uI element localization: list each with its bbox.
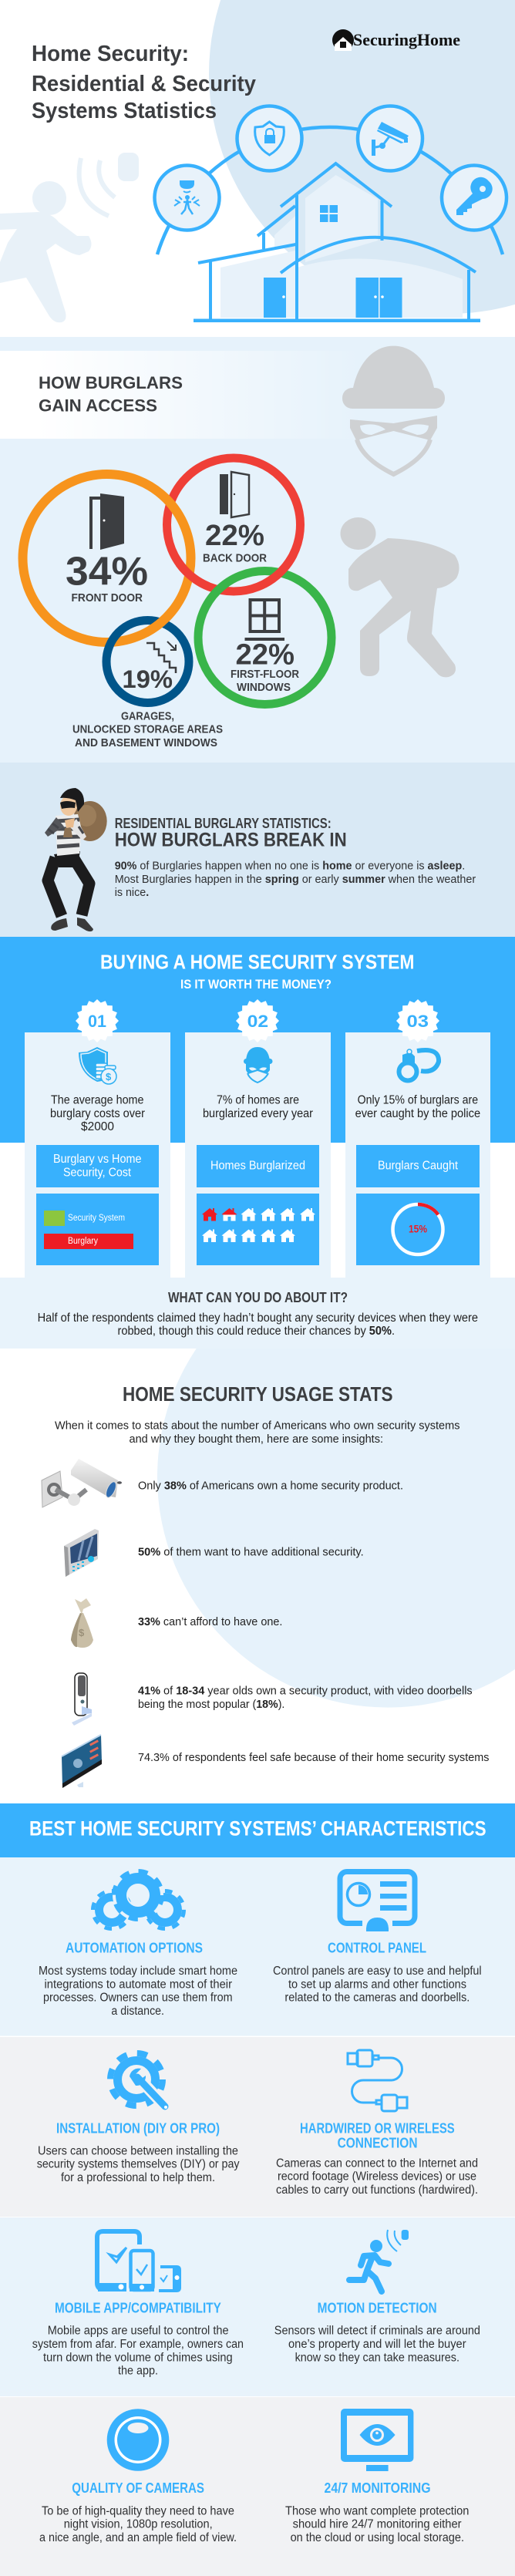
icon: key ring [442, 165, 507, 230]
feature: automation options: a distance. [111, 2005, 164, 2018]
panel: best characteristics heading [0, 1803, 515, 1857]
bar chart [36, 1194, 159, 1265]
icon: control panel [64, 1529, 99, 1577]
text: Only 15% of burglars are [358, 1093, 478, 1107]
box title: Burglary vs Home [53, 1153, 142, 1166]
icon: motion sensor ring [154, 165, 219, 230]
feature: motion detection: know so they can take measures. [295, 2351, 459, 2364]
title [32, 42, 256, 123]
icon: shield lock ring [237, 106, 302, 171]
intro text: When it comes to stats about the number of Americans who own security systems [55, 1419, 459, 1433]
text block [115, 859, 476, 899]
ring: green [198, 571, 332, 705]
title: Systems Statistics [32, 99, 217, 123]
feature: mobile app: system from afar. For example, owners can [32, 2338, 244, 2351]
icon: shield and coins: $ [106, 1071, 112, 1083]
icon: mask [244, 1047, 273, 1083]
card 1 [25, 999, 170, 1278]
feature: motion detection: MOTION DETECTION [318, 2300, 437, 2315]
feature: mobile app: Mobile apps are useful to control the [48, 2325, 229, 2338]
bar chart: Security System [68, 1214, 125, 1223]
text: ever caught by the police [355, 1107, 480, 1120]
feature: mobile app: the app. [118, 2365, 158, 2378]
text block: Most Burglaries happen in the spring or early summer when the weather [115, 873, 476, 886]
heading: HOW BURGLARS BREAK IN [115, 830, 347, 851]
feature: 24/7 monitoring: should hire 24/7 monitoring either [293, 2518, 462, 2531]
feature: quality of cameras: night vision, 1080p resolution, [64, 2518, 213, 2531]
heading: HOME SECURITY USAGE STATS [123, 1382, 393, 1406]
stat: garages: AND BASEMENT WINDOWS [75, 736, 217, 749]
feature: 24/7 monitoring: Those who want complete protection [285, 2504, 469, 2517]
feature: motion detection: one’s property and will let the buyer [288, 2338, 466, 2351]
feature: 24/7 monitoring: on the cloud or using local storage. [291, 2531, 464, 2544]
heading: BUYING A HOME SECURITY SYSTEM [100, 950, 415, 973]
feature: mobile app: MOBILE APP/COMPATIBILITY [55, 2300, 221, 2315]
stat: garages: UNLOCKED STORAGE AREAS [72, 723, 223, 736]
feature: automation options: integrations to automate most of their [45, 1978, 232, 1991]
panel: mobile and motion [0, 2217, 515, 2396]
icon: smart doorbell [72, 1673, 92, 1726]
stat 4 [72, 1673, 473, 1726]
text block: robbed, though this could reduce their chances by 50%. [117, 1325, 395, 1338]
text block: is nice. [115, 886, 149, 899]
feature: quality of cameras: To be of high-quality they need to have [42, 2504, 234, 2517]
icon: camera lens [107, 2409, 169, 2471]
ring: red [167, 458, 301, 591]
icon: gears [93, 1871, 183, 1929]
feature: control panel: to set up alarms and other functions [288, 1978, 466, 1991]
feature: installation: Users can choose between installing the [38, 2144, 238, 2157]
stat 3 [71, 1598, 282, 1648]
heading: IS IT WORTH THE MONEY? [180, 977, 332, 992]
feature: hardwired or wireless [276, 2050, 478, 2197]
ring: orange [23, 474, 191, 642]
heading: GAIN ACCESS [39, 396, 157, 415]
panel: buying a home security system [0, 937, 515, 1278]
logo: SecuringHome: SecuringHome [353, 30, 460, 49]
feature: hardwired or wireless: Cameras can connect to the Internet and [276, 2157, 478, 2170]
text: burglary costs over [50, 1107, 145, 1120]
box title: Burglars Caught [378, 1160, 458, 1172]
stat 1: Only 38% of Americans own a home security product. [138, 1480, 403, 1493]
text: burglarized every year [203, 1107, 313, 1120]
stat: front door: FRONT DOOR [71, 591, 143, 604]
badge 01 [76, 999, 119, 1042]
icon: runner with sensor [349, 2230, 409, 2291]
badge 03 [396, 999, 439, 1042]
icon: shield and coins [79, 1047, 116, 1084]
panel: hero [0, 0, 515, 337]
stat 5 [62, 1735, 489, 1788]
badge 02 [236, 999, 279, 1042]
background circle [157, 1349, 515, 1707]
illustration: burglar with sack [45, 788, 107, 931]
feature: motion detection [274, 2230, 480, 2364]
feature: mobile app: turn down the volume of chimes using [43, 2351, 233, 2364]
stat: garages: GARAGES, [121, 709, 174, 723]
badge 02: 02 [247, 1012, 268, 1031]
stat: front door [66, 493, 148, 604]
panel: how burglars gain access [0, 337, 515, 763]
feature: hardwired or wireless: record footage (Wireless devices) or use [278, 2170, 476, 2184]
stat: first-floor windows: 22% [236, 638, 295, 671]
stat 4: 41% of 18-34 year olds own a security product, with video doorbells [138, 1684, 473, 1697]
intro text: and why they bought them, here are some insights: [130, 1433, 383, 1446]
card 2 [185, 999, 331, 1278]
doors [264, 278, 402, 318]
stat: back door [203, 472, 267, 564]
icon: monitor with eye [341, 2409, 413, 2471]
stat 1 [42, 1459, 403, 1507]
feature: installation: security systems themselves (DIY) or pay [37, 2158, 240, 2171]
feature: hardwired or wireless: cables to carry out functions (hardwired). [276, 2184, 478, 2197]
box title [197, 1145, 319, 1187]
panel: installation and hardwired [0, 2037, 515, 2217]
feature: 24/7 monitoring [285, 2409, 469, 2544]
box title [356, 1145, 480, 1187]
icon: crouching burglar [341, 517, 459, 677]
intro text [55, 1419, 459, 1446]
ring overlaps [148, 557, 298, 637]
heading [39, 373, 183, 415]
icon: usb cable [348, 2050, 407, 2111]
icon: handcuffs [399, 1049, 439, 1081]
icon: security camera ring [358, 106, 422, 171]
panel: automation and control [0, 1857, 515, 2036]
feature: mobile app [32, 2231, 244, 2378]
house pictogram chart [197, 1194, 319, 1265]
panel: what can you do: WHAT CAN YOU DO ABOUT IT? [168, 1289, 348, 1305]
stat: first-floor windows [231, 600, 299, 694]
feature: installation: INSTALLATION (DIY OR PRO) [56, 2120, 220, 2136]
feature: control panel [273, 1872, 482, 2005]
feature: control panel: CONTROL PANEL [328, 1941, 426, 1956]
ring: dark blue [106, 620, 189, 703]
badge 01: 01 [88, 1012, 106, 1031]
feature: quality of cameras: QUALITY OF CAMERAS [72, 2480, 204, 2496]
icon: money bag [71, 1598, 93, 1648]
feature: motion detection: Sensors will detect if criminals are around [274, 2325, 480, 2338]
icon: gear and wrench [110, 2053, 167, 2109]
card 3 [345, 999, 490, 1278]
heading [115, 816, 347, 851]
feature: 24/7 monitoring: 24/7 MONITORING [324, 2480, 431, 2496]
feature: quality of cameras [39, 2409, 237, 2544]
icon: masked burglar head [342, 346, 445, 474]
icon: money bag: $ [79, 1627, 85, 1638]
feature: quality of cameras: a nice angle, and an ample field of view. [39, 2531, 237, 2544]
feature: automation options [39, 1871, 237, 2018]
text: 7% of homes are [217, 1093, 299, 1107]
stat 4: being the most popular (18%). [138, 1698, 284, 1711]
heading [100, 950, 415, 992]
panel: home security usage stats [42, 1349, 515, 1788]
text: The average home [51, 1093, 143, 1107]
stat: first-floor windows: FIRST-FLOOR [231, 668, 299, 681]
badge 03: 03 [407, 1012, 429, 1031]
heading: HOW BURGLARS [39, 373, 183, 392]
feature: hardwired or wireless: CONNECTION [338, 2136, 418, 2151]
icon: security camera [42, 1459, 122, 1507]
box title [36, 1145, 159, 1187]
stat: first-floor windows: WINDOWS [237, 681, 291, 694]
donut chart [356, 1194, 480, 1265]
window [320, 205, 338, 222]
panel: cameras and monitoring [0, 2397, 515, 2576]
text block: Half of the respondents claimed they hadn’t bought any security devices when they were [38, 1312, 478, 1325]
heading: RESIDENTIAL BURGLARY STATISTICS: [115, 816, 332, 831]
box title: Security, Cost [63, 1166, 131, 1180]
stat 3: 33% can’t afford to have one. [138, 1615, 282, 1628]
icon: ghost running figure [0, 153, 139, 322]
stat: garages [72, 641, 223, 749]
stat 2: 50% of them want to have additional security. [138, 1545, 364, 1559]
text [203, 1093, 313, 1120]
feature: automation options: AUTOMATION OPTIONS [66, 1941, 203, 1956]
icon: control panel [340, 1872, 415, 1931]
text [355, 1093, 480, 1120]
feature: automation options: Most systems today include smart home [39, 1965, 237, 1978]
text [50, 1093, 145, 1133]
feature: installation: for a professional to help them. [61, 2171, 215, 2184]
box title: Homes Burglarized [210, 1160, 305, 1172]
feature: automation options: processes. Owners can use them from [43, 1992, 233, 2005]
icon: devices [97, 2231, 180, 2291]
stat 5: 74.3% of respondents feel safe because of their home security systems [138, 1751, 489, 1764]
feature: control panel: Control panels are easy to use and helpful [273, 1965, 482, 1978]
feature: installation [37, 2053, 240, 2184]
feature: hardwired or wireless: HARDWIRED OR WIRELESS [300, 2120, 455, 2136]
network arc [157, 127, 503, 254]
panel: what can you do [0, 1278, 515, 1349]
stat: garages: 19% [122, 665, 173, 693]
stat: front door: 34% [66, 549, 148, 594]
text block [38, 1312, 478, 1338]
title: Home Security: [32, 42, 189, 66]
hero background circle [209, 0, 515, 314]
bar chart: Burglary [68, 1237, 98, 1246]
stat: back door: 22% [205, 520, 264, 552]
stat 2 [64, 1529, 364, 1577]
house illustration [194, 163, 480, 322]
text: $2000 [81, 1120, 114, 1133]
feature: control panel: related to the cameras and doorbells. [284, 1992, 470, 2005]
panel: how burglars break in [0, 763, 515, 937]
text block: 90% of Burglaries happen when no one is home or everyone is asleep. [115, 859, 465, 873]
donut chart: 15% [409, 1223, 427, 1235]
stat: back door: BACK DOOR [203, 552, 267, 564]
title: Residential & Security [32, 72, 256, 96]
icon: monitor dashboard [62, 1735, 102, 1788]
